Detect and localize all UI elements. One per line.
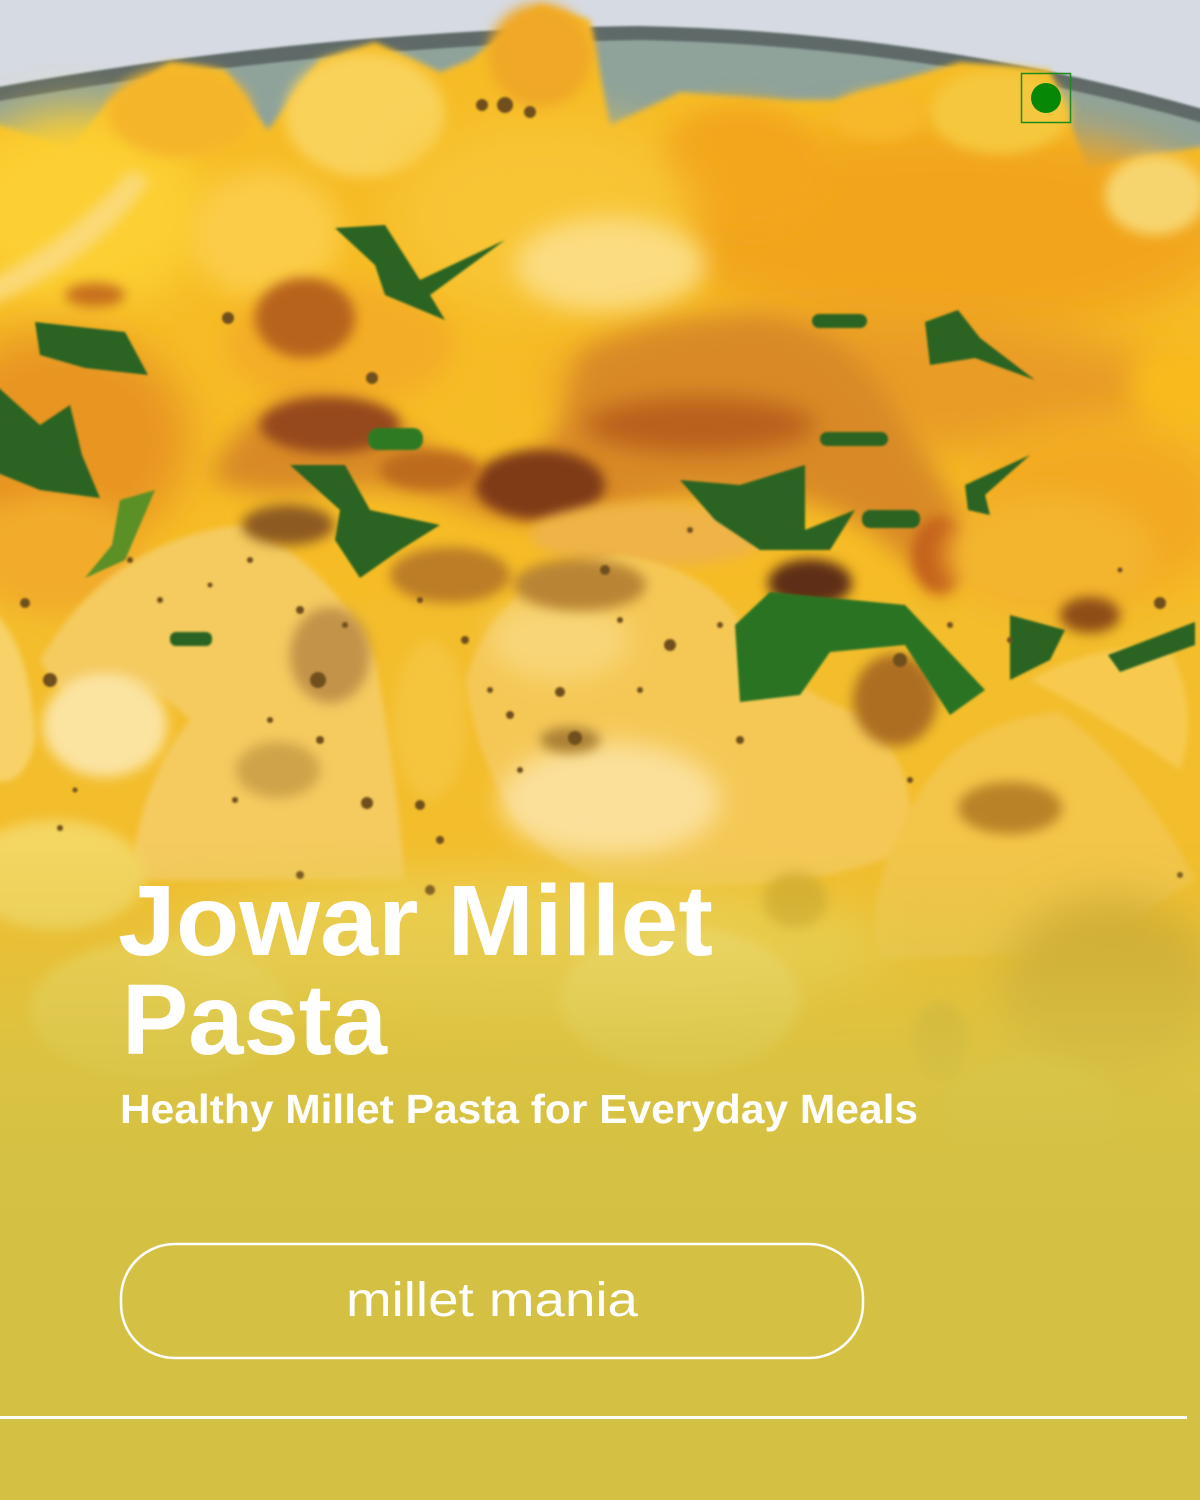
warm orange pasta on right — [670, 125, 1200, 335]
subtitle: Healthy Millet Pasta for Everyday Meals — [120, 1086, 918, 1132]
bright yellow pasta on left — [0, 110, 210, 310]
plate rim — [0, 26, 1200, 240]
parsley garnish — [0, 225, 1195, 715]
yellow gradient overlay — [0, 840, 1200, 1260]
pale pasta swells in lower fade — [30, 872, 1120, 1162]
table surface behind the plate — [0, 0, 1200, 200]
button: millet mania: millet mania — [346, 1274, 638, 1327]
creamy lower pasta — [0, 525, 1195, 960]
lower orange sauce — [530, 503, 770, 567]
title: Pasta — [122, 964, 388, 1076]
pepper specks — [20, 97, 1183, 895]
toasted spice patches — [65, 283, 1120, 834]
orange cheese middle band — [225, 283, 455, 407]
button: millet mania — [121, 1244, 863, 1358]
upper pasta mass — [0, 5, 1200, 600]
plate surface — [0, 40, 1200, 260]
title — [118, 865, 713, 1076]
browned cheese crust — [210, 315, 975, 600]
icon: vegetarian mark — [1022, 74, 1070, 122]
title: Jowar Millet — [118, 865, 713, 977]
